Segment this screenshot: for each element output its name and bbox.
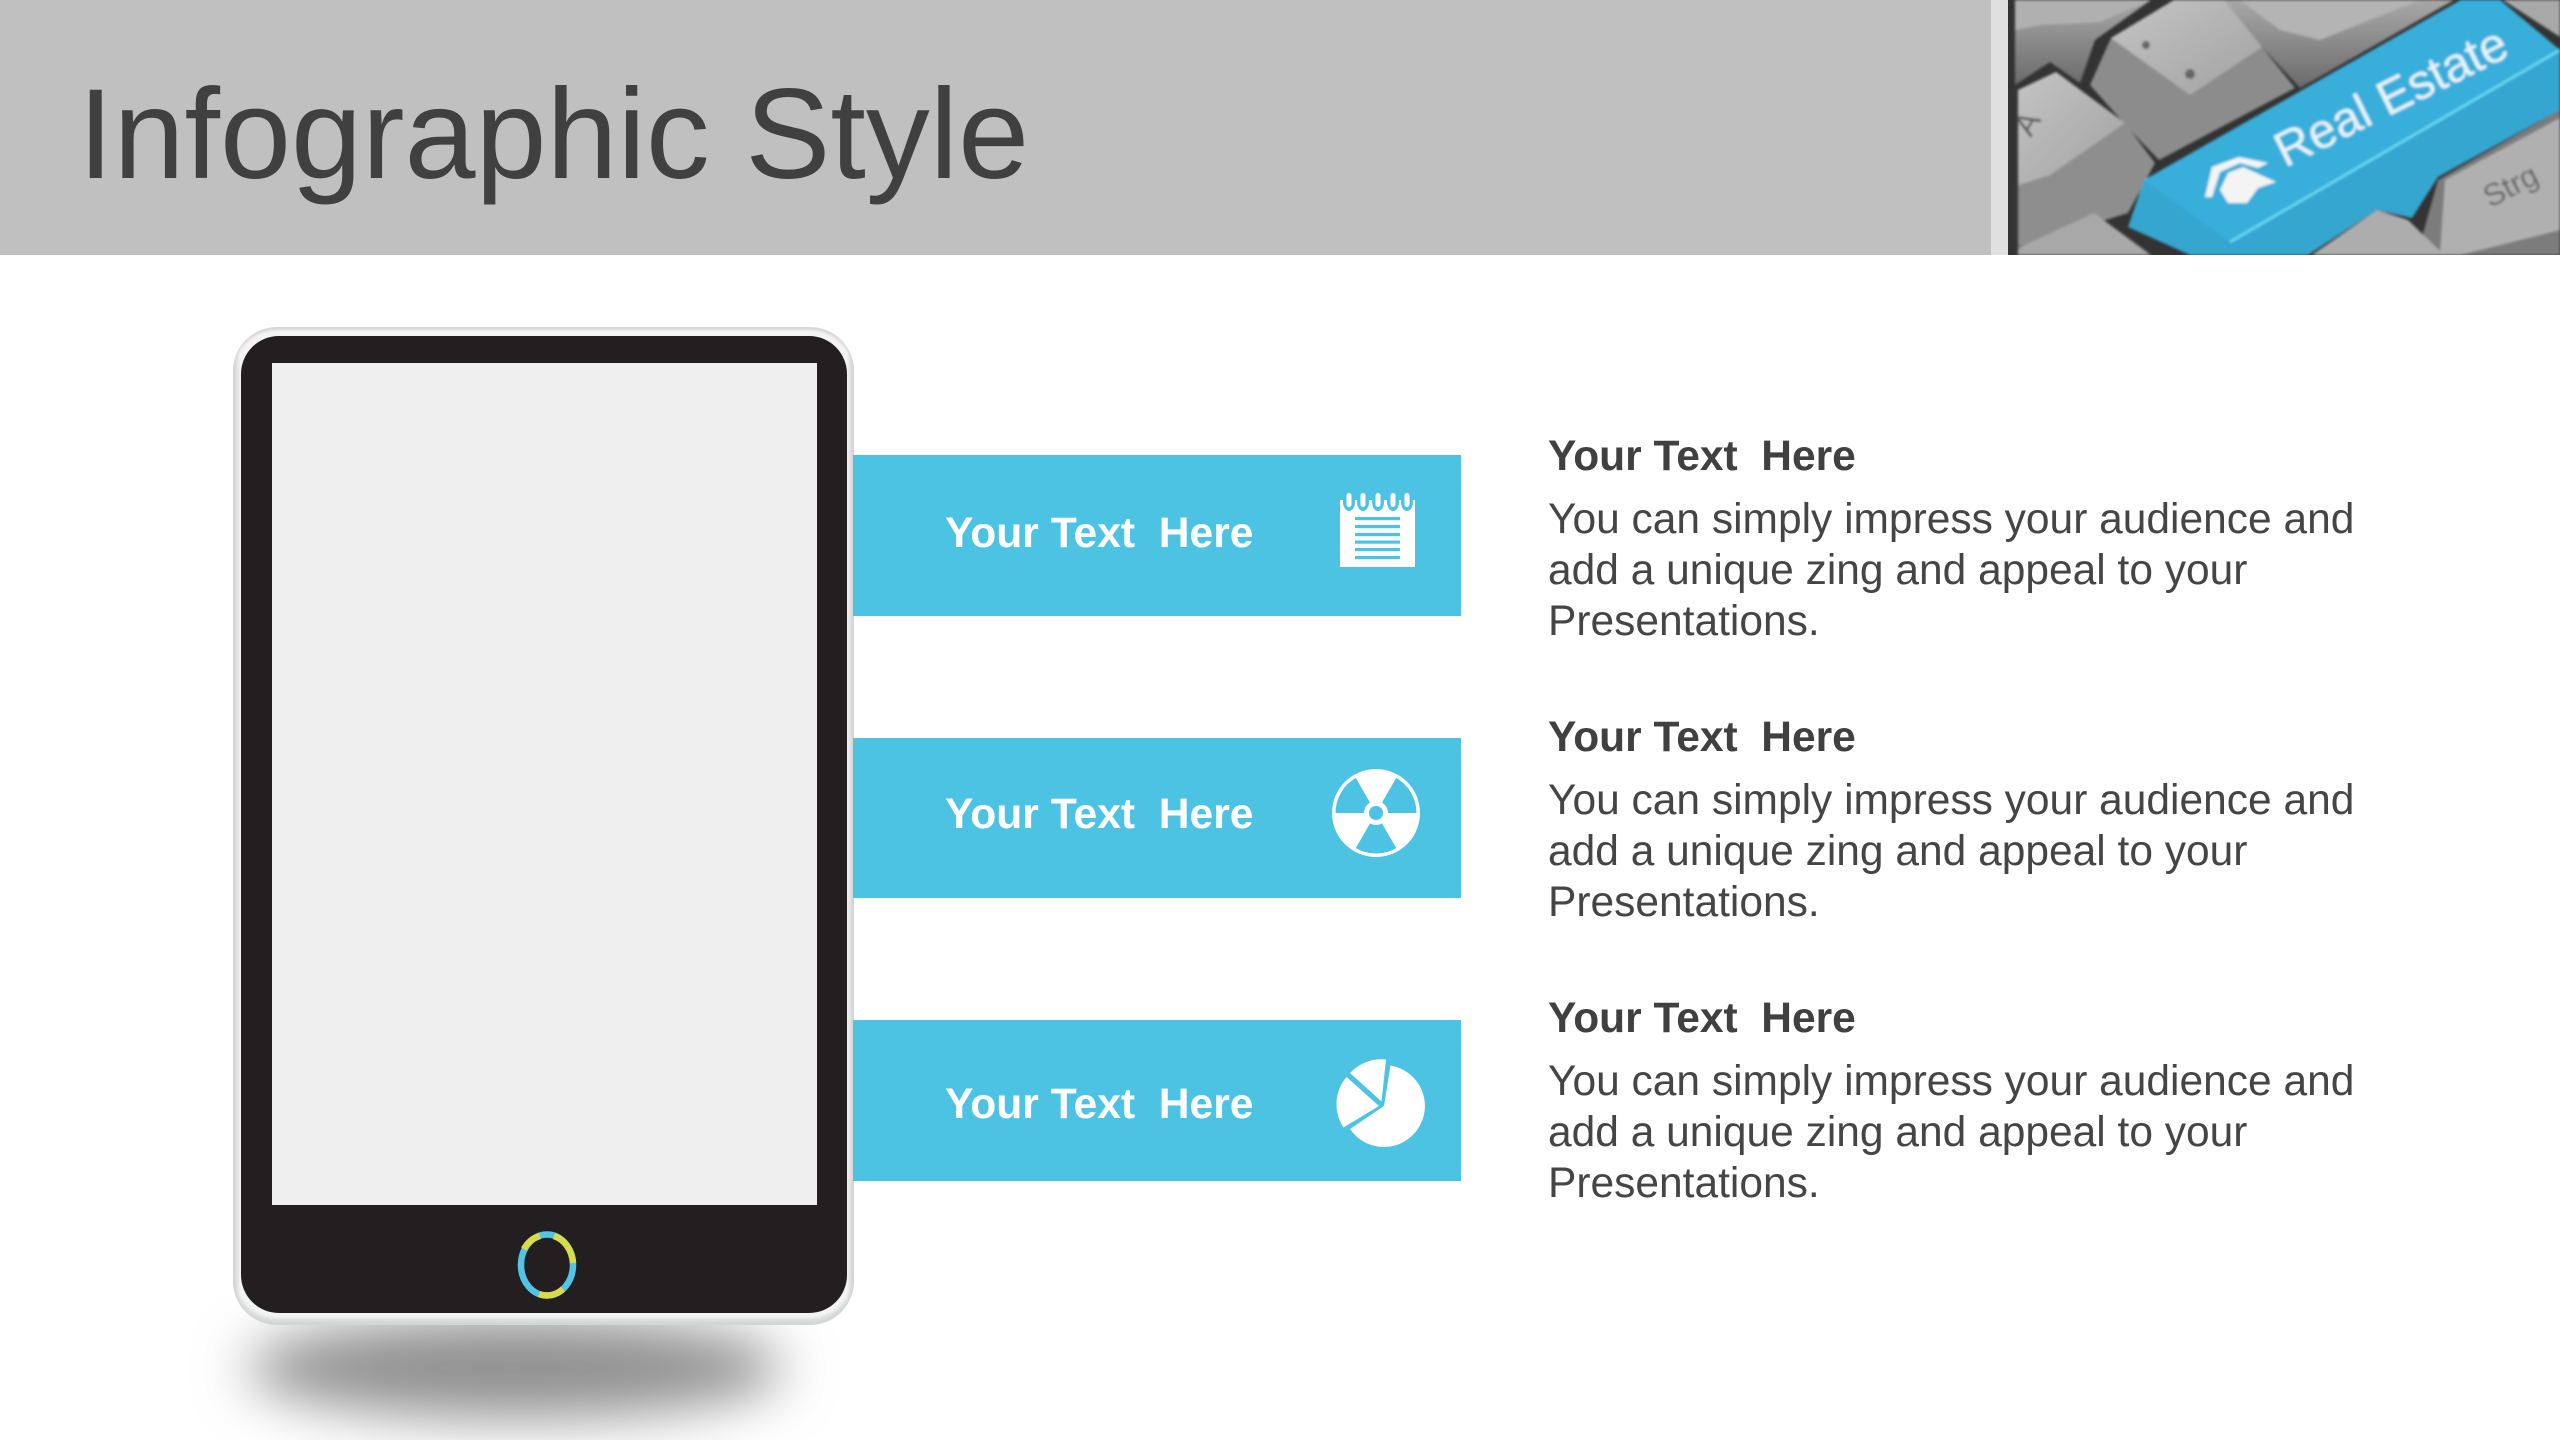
tablet screen (272, 363, 817, 1205)
text block 3 (1548, 995, 2354, 1207)
bar 1 (853, 455, 1461, 616)
title: Infographic Style (78, 63, 1029, 206)
icon: notepad (1340, 493, 1415, 567)
text block 2 (1548, 714, 2354, 926)
block 1 heading: Your Text Here (1548, 433, 1856, 480)
bar 2 label: Your Text Here (945, 790, 1254, 838)
block 2 heading: Your Text Here (1548, 714, 1856, 761)
block 2 body: You can simply impress your audience and add a unique zing and appeal to your Presentations. (1548, 776, 2354, 926)
home button ring (518, 1231, 576, 1299)
text block 1 (1548, 433, 2354, 645)
header photo: keyboard with Real Estate key: A (2006, 104, 2048, 142)
bar 3 (853, 1020, 1461, 1181)
header band (0, 0, 2560, 255)
tablet black body (241, 336, 847, 1313)
icon: radiation symbol (1332, 769, 1420, 857)
block 1 body: You can simply impress your audience and add a unique zing and appeal to your Presentations. (1548, 496, 2354, 645)
block 3 heading: Your Text Here (1548, 995, 1856, 1042)
header photo: keyboard with Real Estate key: Strg (2477, 157, 2544, 214)
tablet device (233, 327, 854, 1325)
tablet silver frame (233, 327, 854, 1325)
header photo: keyboard with Real Estate key (1991, 0, 2560, 255)
bar 2 (853, 738, 1461, 898)
block 3 body: You can simply impress your audience and add a unique zing and appeal to your Presentations. (1548, 1058, 2354, 1207)
tablet shadow (223, 1318, 806, 1440)
header photo: keyboard with Real Estate key: Real Estate (2266, 16, 2517, 178)
bar 1 label: Your Text Here (945, 509, 1254, 557)
icon: pie chart (1336, 1059, 1425, 1147)
bar 3 label: Your Text Here (945, 1080, 1254, 1128)
